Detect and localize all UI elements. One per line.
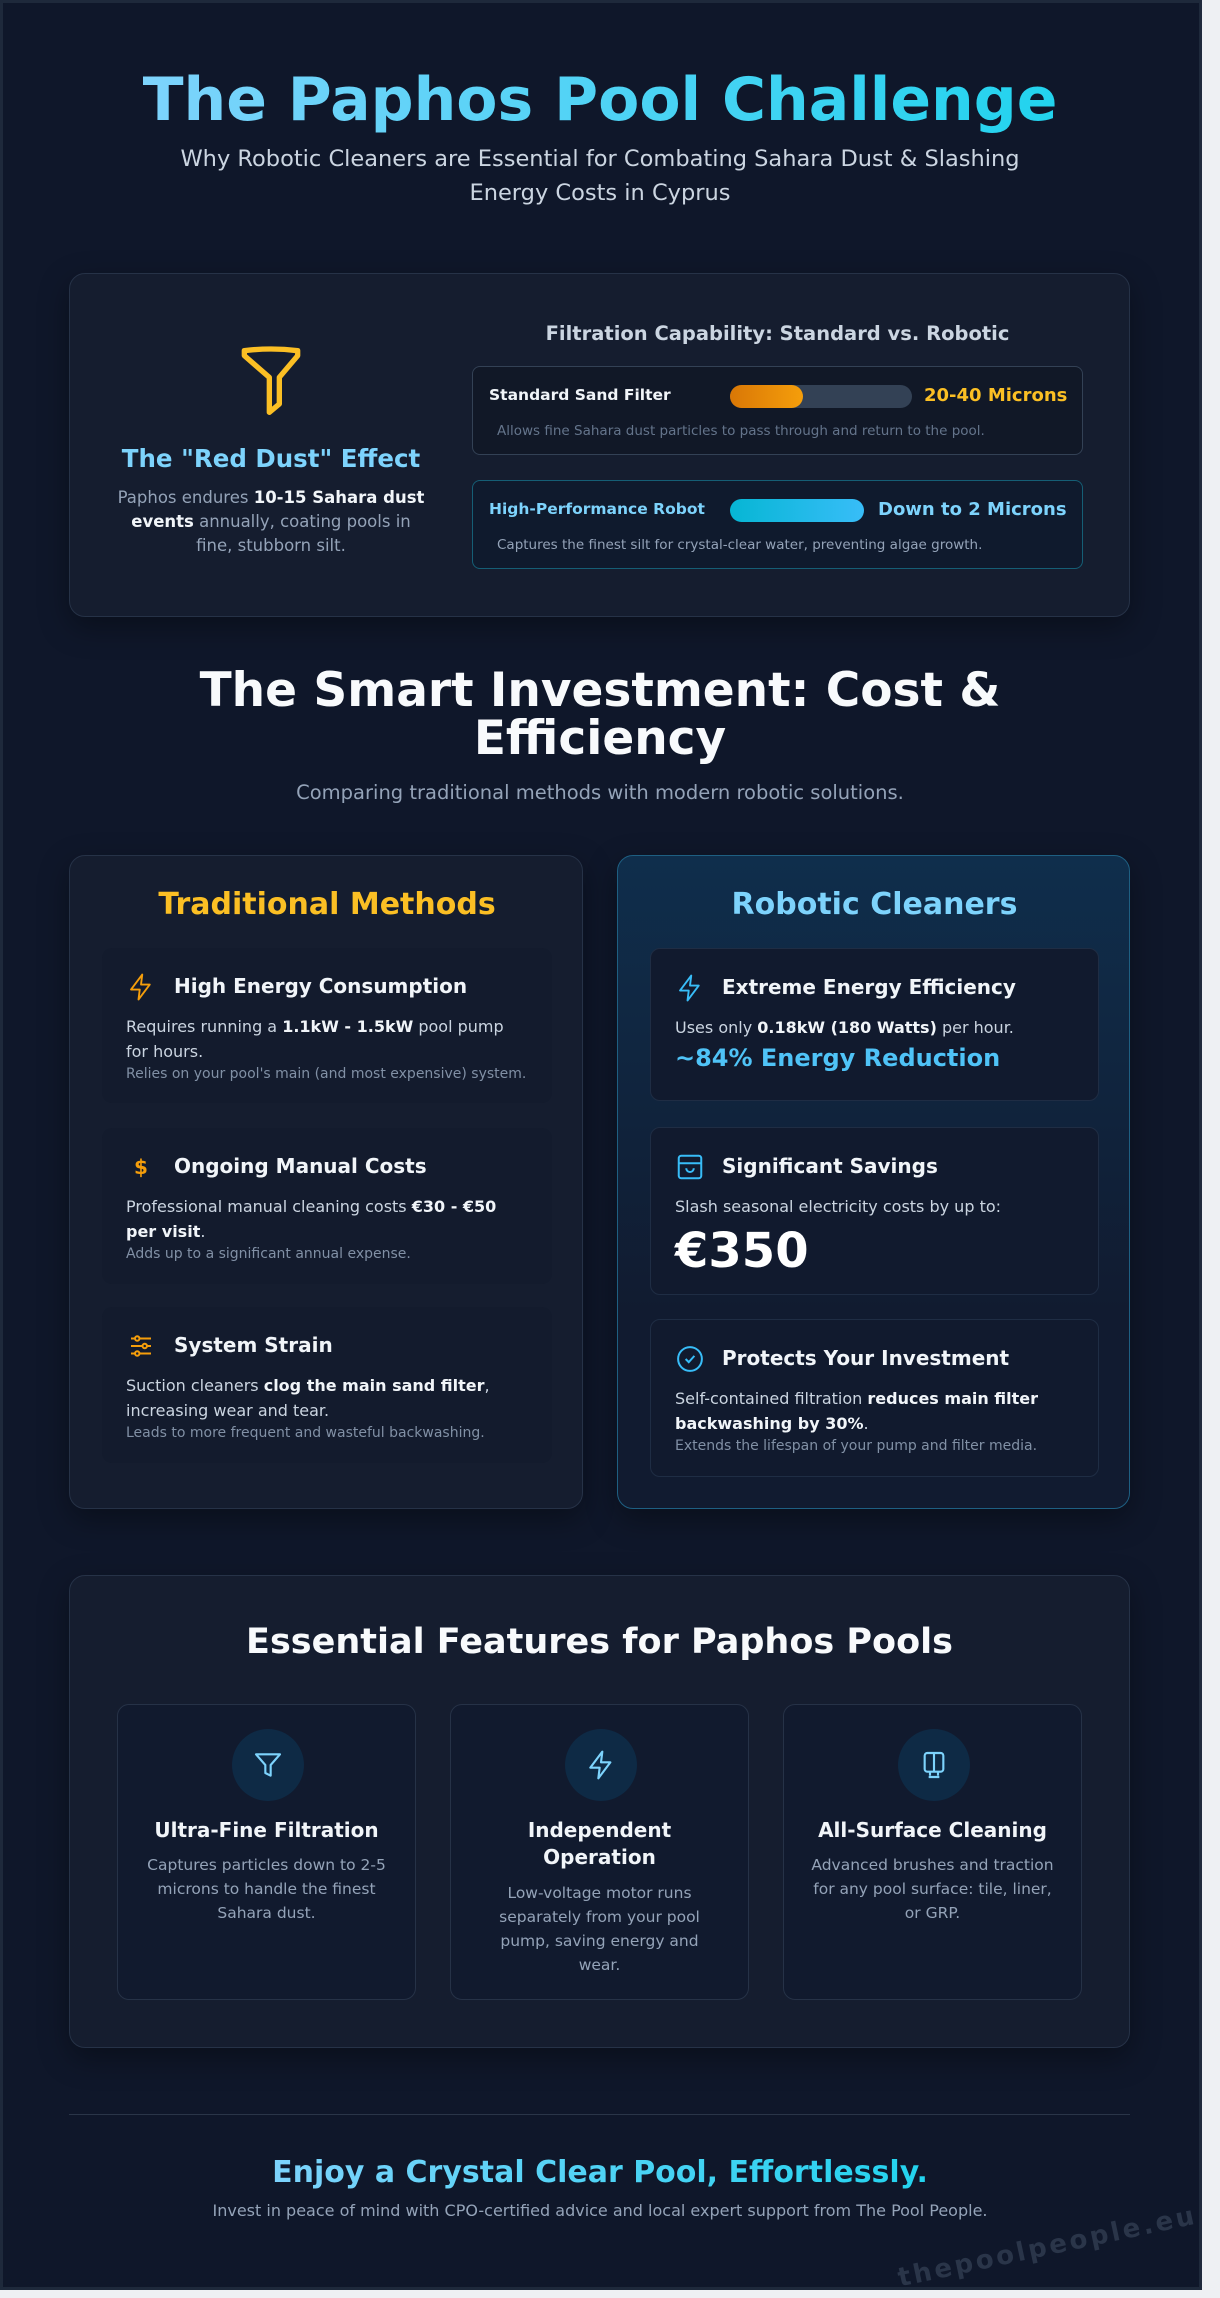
card: protects investment: Protects Your Investment [722,1346,1009,1370]
card: manual costs: $ [134,1155,148,1179]
feature: all-surface cleaning: All-Surface Cleaning [818,1818,1047,1842]
card: standard filter [472,366,1083,455]
card: savings: Significant Savings [722,1154,938,1178]
feature: ultra-fine filtration: Ultra-Fine Filtration [154,1818,379,1842]
footer heading: Enjoy a Crystal Clear Pool, Effortlessly. [272,2155,928,2190]
bar: standard [730,385,912,408]
card: protects investment [650,1319,1099,1477]
text: red dust description: Paphos endures 10-15 Sahara dust events annually, coating pools in fine, stubborn silt. [118,488,424,555]
card: savings: €350 [675,1223,809,1279]
card: energy efficiency: Uses only 0.18kW (180 Watts) per hour. [675,1018,1014,1037]
panel: red dust / filtration [69,273,1130,617]
card: robot filter [472,480,1083,569]
card: energy efficiency: ~84% Energy Reduction [675,1044,1000,1072]
title: The Paphos Pool Challenge [143,65,1057,135]
card: high energy [102,948,552,1103]
card: protects investment: Extends the lifespan of your pump and filter media. [675,1438,1037,1454]
card: system strain [102,1307,552,1463]
card: energy efficiency [650,948,1099,1101]
subtitle: Why Robotic Cleaners are Essential for Combating Sahara Dust & Slashing Energy Costs in Cyprus [180,146,1020,206]
card: robot filter: Down to 2 Microns [878,499,1067,520]
card: standard filter: Standard Sand Filter [489,386,671,404]
watermark: thepoolpeople.eu [895,2201,1200,2293]
card: high energy: Relies on your pool's main (and most expensive) system. [126,1066,526,1082]
card: system strain: Leads to more frequent and wasteful backwashing. [126,1425,485,1441]
card: energy efficiency: Extreme Energy Efficiency [722,975,1016,999]
card: protects investment: Self-contained filtration reduces main filter backwashing by 30%. [675,1389,1038,1433]
card: robot filter: Captures the finest silt for crystal-clear water, preventing algae growth. [497,537,982,553]
feature: independent operation [450,1704,749,2000]
card: system strain: Suction cleaners clog the main sand filter, increasing wear and tear. [126,1376,490,1420]
subheading: Comparing traditional methods with modern robotic solutions. [296,781,904,804]
card: high energy: Requires running a 1.1kW - 1.5kW pool pump for hours. [126,1017,504,1061]
card: manual costs [102,1128,552,1284]
card: manual costs: Adds up to a significant annual expense. [126,1246,411,1262]
panel: essential features [69,1575,1130,2048]
icon: funnel [242,346,300,415]
card: system strain: System Strain [174,1333,333,1357]
card: savings: Slash seasonal electricity costs by up to: [675,1197,1001,1216]
card: robot filter: High-Performance Robot [489,500,705,518]
card: savings [650,1127,1099,1295]
panel: robotic cleaners [617,855,1130,1509]
heading: traditional: Traditional Methods [158,887,496,922]
card: high energy: High Energy Consumption [174,974,467,998]
feature: independent operation: Low-voltage motor runs separately from your pool pump, saving energy and wear. [499,1884,700,1974]
feature: independent operation: Operation [543,1845,656,1869]
heading: smart investment: The Smart Investment: Cost & Efficiency [200,663,1000,766]
card: manual costs: Professional manual cleaning costs €30 - €50 per visit. [126,1197,496,1241]
heading: robotic: Robotic Cleaners [732,887,1017,922]
heading: essential features: Essential Features for Paphos Pools [246,1622,953,1662]
footer text: Invest in peace of mind with CPO-certified advice and local expert support from The Pool People. [212,2201,988,2220]
bar: robot [730,499,864,522]
card: standard filter: Allows fine Sahara dust particles to pass through and return to the pool. [497,423,985,439]
heading: red dust: The "Red Dust" Effect [122,444,420,473]
card: manual costs: Ongoing Manual Costs [174,1154,427,1178]
heading: filtration capability: Filtration Capability: Standard vs. Robotic [546,322,1009,345]
feature: ultra-fine filtration: Captures particles down to 2-5 microns to handle the finest Sahara dust. [147,1856,386,1922]
card: standard filter: 20-40 Microns [924,385,1067,406]
feature: independent operation: Independent [528,1818,671,1842]
feature: ultra-fine filtration [117,1704,416,2000]
feature: all-surface cleaning: Advanced brushes and traction for any pool surface: tile, liner, or GRP. [811,1856,1054,1922]
panel: traditional methods [69,855,583,1509]
feature: all-surface cleaning [783,1704,1082,2000]
